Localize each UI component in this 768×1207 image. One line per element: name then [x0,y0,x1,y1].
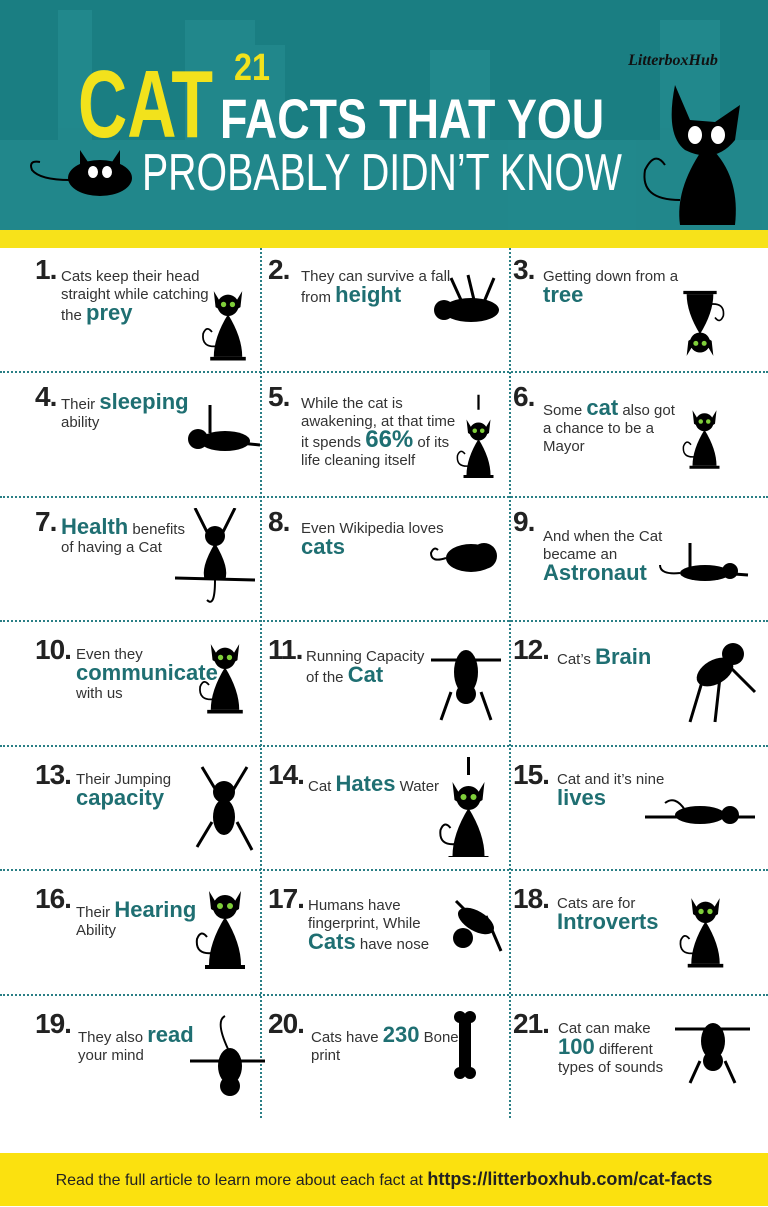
title: PROBABLY DIDN’T KNOW [142,144,622,202]
fact 1: 1. [35,254,56,285]
fact 2 [268,254,499,322]
fact 15 [513,759,755,824]
fact 17: Humans have [308,897,401,914]
fact 3 [513,254,724,356]
title: 21 [234,47,270,89]
logo: LitterboxHub [628,52,718,69]
fact 15: Cat and it’s nine [557,771,664,788]
fact 4 [35,381,260,451]
fact 11: of the Cat [306,662,383,687]
fact 21 [513,1008,750,1084]
icon: bone [454,1011,476,1079]
fact 16: Ability [76,922,116,939]
fact 6 [513,381,720,469]
fact 4: 4. [35,381,56,412]
fact 10: 10. [35,634,71,665]
fact 3: tree [543,282,583,307]
fact 17 [268,883,502,954]
fact 13: Their Jumping [76,771,171,788]
fact 11: Running Capacity [306,648,424,665]
fact 2: 2. [268,254,289,285]
fact 5 [268,381,494,478]
fact 18: 18. [513,883,549,914]
fact 5: it spends 66% of its [301,426,449,453]
fact 8 [268,506,497,572]
fact 9 [513,506,748,585]
fact 18: Introverts [557,909,658,934]
fact 14: Cat Hates Water [308,771,439,796]
fact 10: Even they [76,646,143,663]
fact 5: While the cat is [301,395,403,412]
yellow band [0,230,768,248]
fact 21: types of sounds [558,1059,663,1076]
fact 2: from height [301,282,401,307]
fact 13 [35,759,254,851]
title: FACTS THAT YOU [220,87,604,150]
fact 1 [35,254,246,360]
fact 5: life cleaning itself [301,452,415,469]
fact 1: Cats keep their head [61,268,199,285]
fact 2: They can survive a fall [301,268,450,285]
fact 11: 11. [268,634,302,665]
fact 6: Mayor [543,438,585,455]
fact 6: 6. [513,381,534,412]
fact 4: ability [61,414,99,431]
fact 18 [513,883,724,968]
fact 20: print [311,1047,340,1064]
fact 1: the prey [61,300,133,325]
fact 3: 3. [513,254,534,285]
fact 12: 12. [513,634,549,665]
fact 16: Their Hearing [76,897,196,922]
fact 16 [35,883,245,969]
fact 12: Cat’s Brain [557,644,651,669]
fact 8: Even Wikipedia loves [301,520,444,537]
fact 9: Astronaut [543,560,647,585]
fact 6: Some cat also got [543,395,675,420]
title [78,47,622,202]
fact 19: 19. [35,1008,71,1039]
fact 4: Their sleeping [61,389,189,414]
fact 21: 100 different [558,1034,653,1059]
fact 19: They also read [78,1022,194,1047]
icon: crouching cat left [30,150,132,196]
fact 15: lives [557,785,606,810]
fact 8: 8. [268,506,289,537]
fact 16: 16. [35,883,71,914]
fact 13: capacity [76,785,164,810]
fact 14: 14. [268,759,304,790]
fact 21: 21. [513,1008,549,1039]
header: teal banner [0,0,768,230]
fact 19: your mind [78,1047,144,1064]
footer [0,1153,768,1206]
fact 1: straight while catching [61,286,209,303]
fact 18: Cats are for [557,895,635,912]
fact 5: 5. [268,381,289,412]
fact 7: Health benefits [61,514,185,539]
fact 10: communicate [76,660,218,685]
fact 9: became an [543,546,617,563]
fact 14 [268,757,488,857]
fact 19 [35,1008,265,1096]
background buildings [0,10,768,230]
fact 7: of having a Cat [61,539,162,556]
fact 11 [268,634,501,720]
fact 8: cats [301,534,345,559]
fact 21: Cat can make [558,1020,651,1037]
fact 20: Cats have 230 Bones [311,1022,466,1047]
fact 17: Cats have nose [308,929,429,954]
fact 9: And when the Cat [543,528,662,545]
fact 5: awakening, at that time [301,413,455,430]
fact 15: 15. [513,759,549,790]
fact 10: with us [76,685,123,702]
fact 6: a chance to be a [543,420,654,437]
fact 20 [268,1008,476,1079]
fact 10 [35,634,243,714]
fact 9: 9. [513,506,534,537]
fact 7 [35,506,255,603]
fact 13: 13. [35,759,71,790]
footer: Read the full article to learn more about each fact at https://litterboxhub.com/cat-facts [56,1169,712,1189]
fact 17: fingerprint, While [308,915,421,932]
fact 12 [513,634,756,722]
fact 20: 20. [268,1008,304,1039]
title: CAT [78,51,213,158]
fact 17: 17. [268,883,304,914]
fact 3: Getting down from a [543,268,678,285]
icon: sitting cat right [643,85,740,225]
fact 7: 7. [35,506,56,537]
